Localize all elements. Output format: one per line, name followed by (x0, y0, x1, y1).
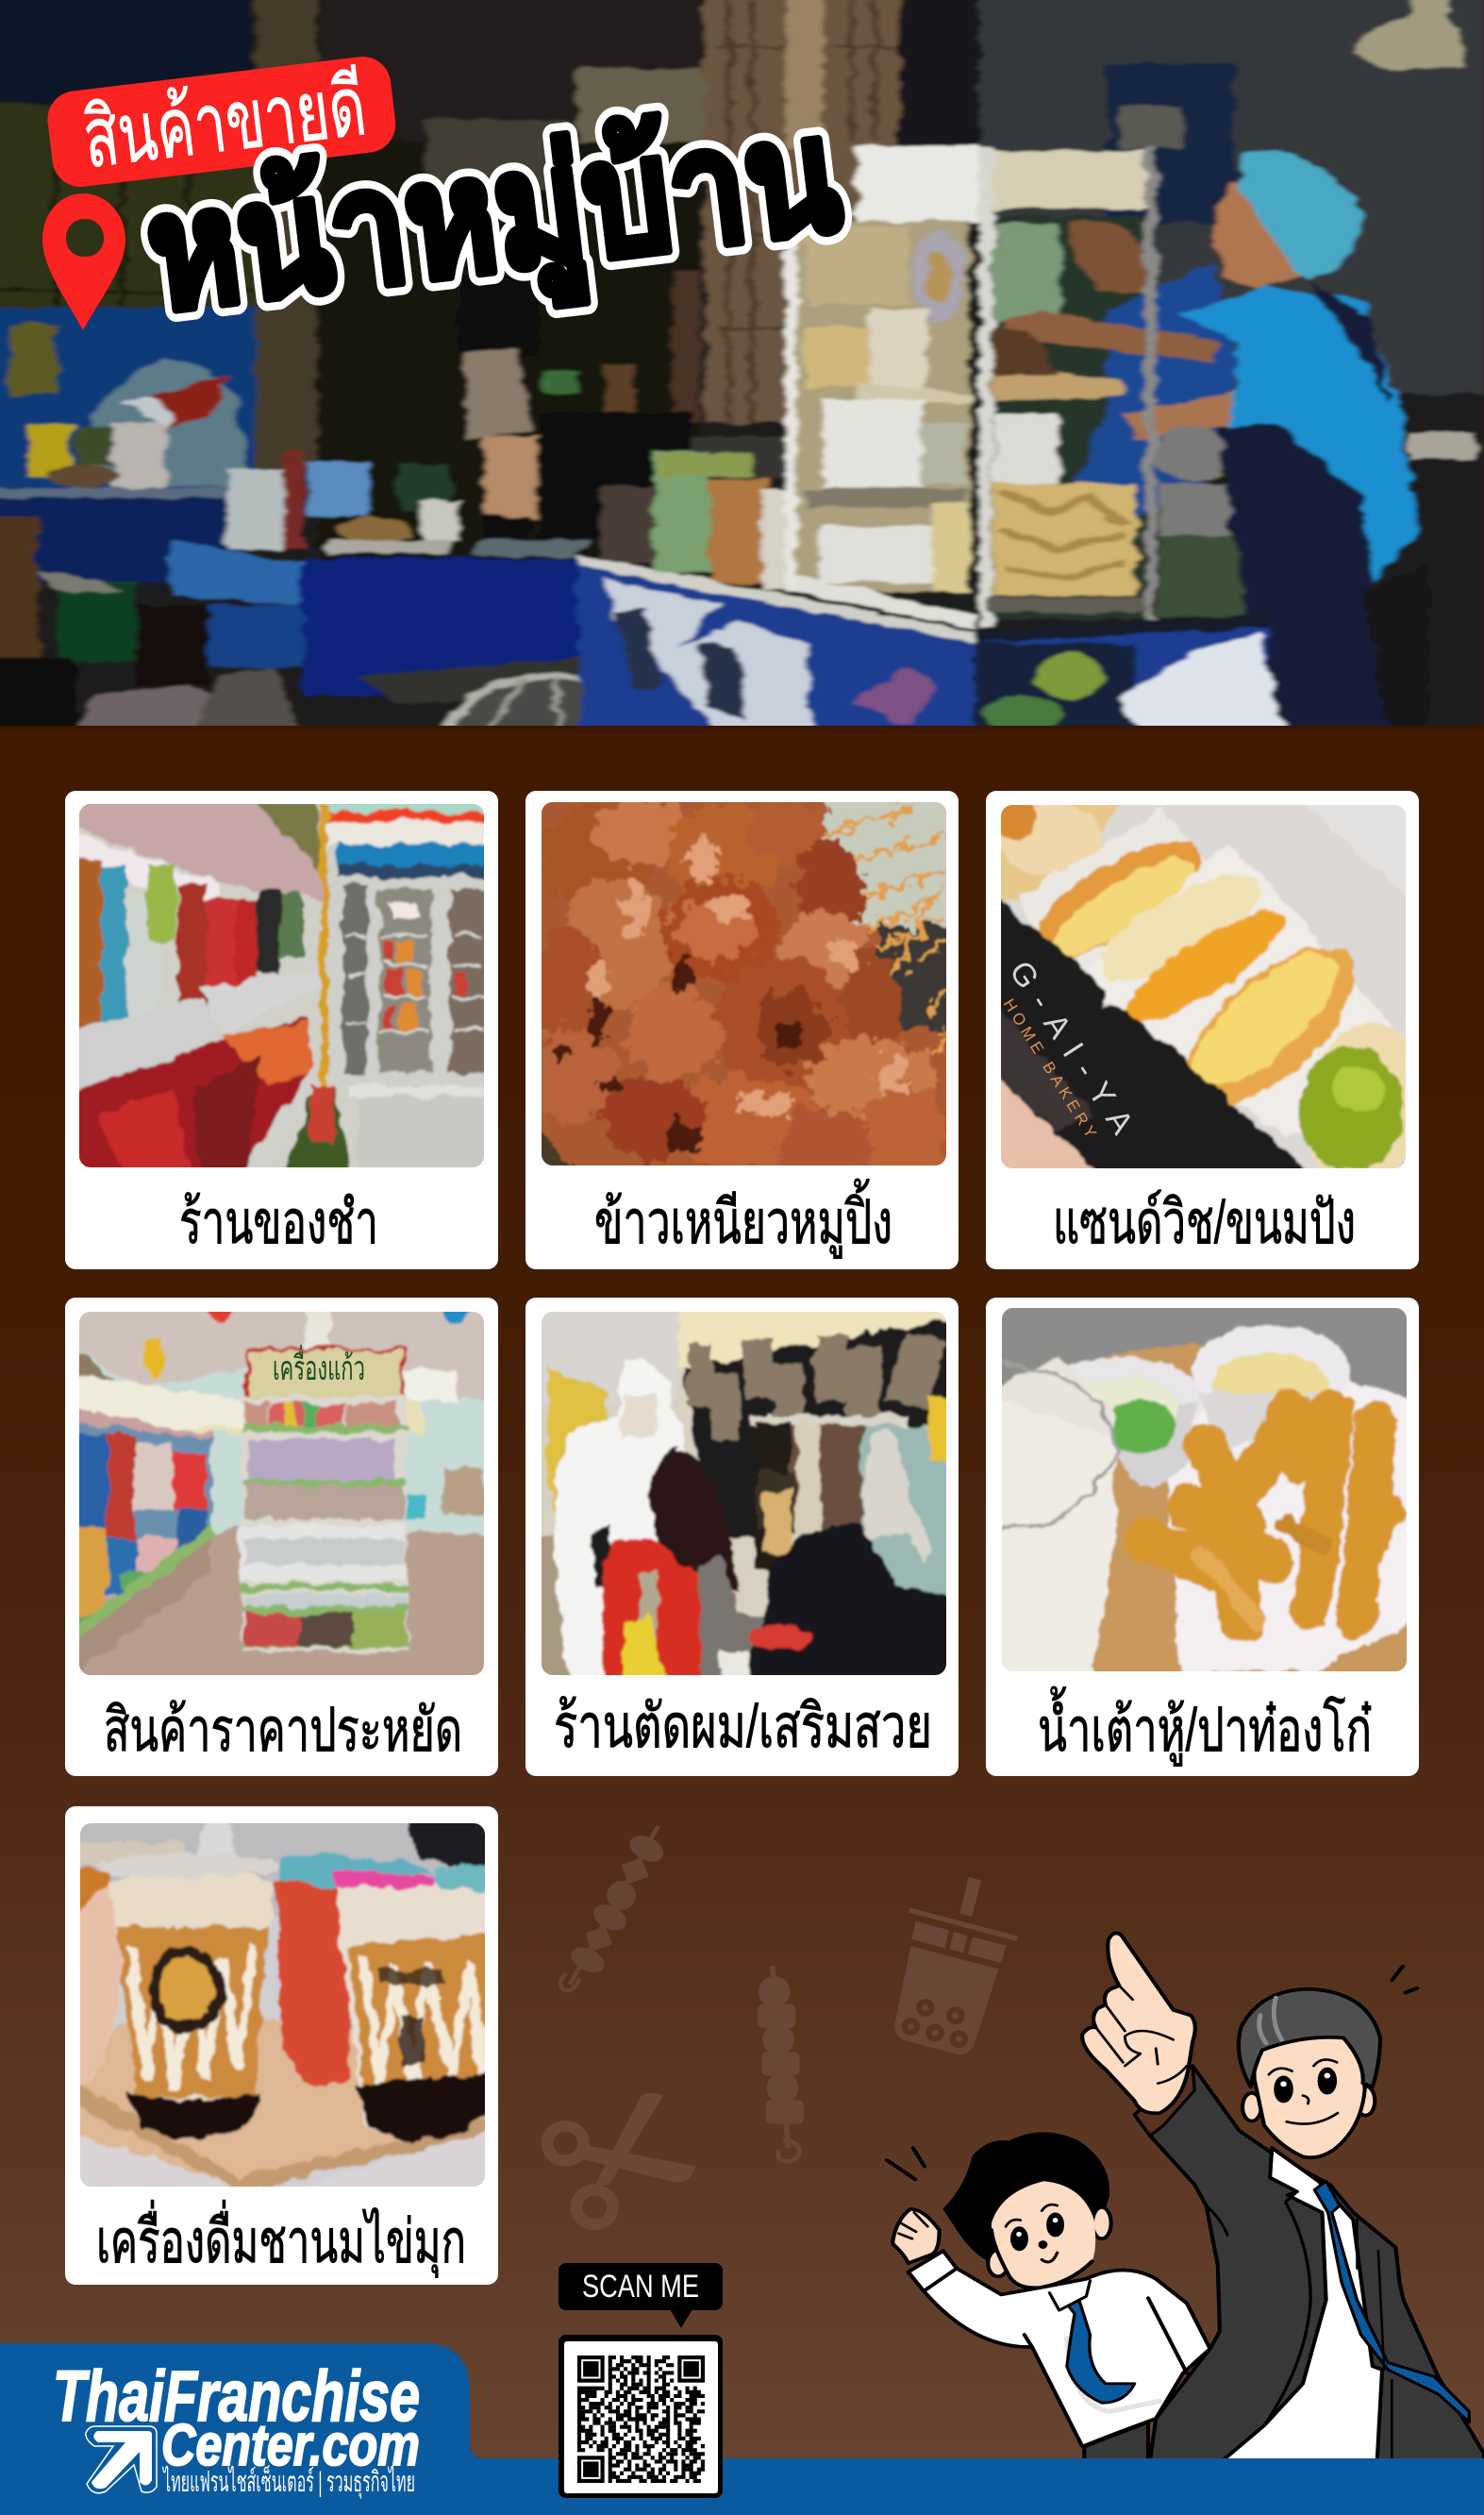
label: ร้านตัดผม/เสริมสวย (554, 1692, 932, 1760)
left tables (171, 540, 303, 606)
icon: arrow (86, 2426, 157, 2493)
decorative icon: bubble tea cup (894, 1877, 1018, 2054)
QR code (559, 2335, 723, 2498)
title badge: best sellers: สินค้าขายดี (78, 59, 371, 185)
woman (1239, 150, 1362, 281)
card: budget goods (60, 1293, 504, 1776)
boy in white shirt (892, 2134, 1210, 2463)
decorative icon: scissors (547, 2093, 695, 2224)
stacked bowls (601, 486, 658, 563)
scan me speech bubble: SCAN ME (582, 2269, 699, 2305)
counter (575, 554, 1268, 746)
label: สินค้าราคาประหยัด (104, 1696, 462, 1764)
photo: boxed sandwiches (1001, 805, 1406, 1168)
card: grocery store (60, 785, 504, 1269)
decorative icon: skewer tilted (560, 1826, 668, 1990)
hero photo: street food stall (0, 0, 1484, 746)
pointing hand (1082, 1933, 1195, 2113)
photo: budget store aisle (79, 1312, 484, 1675)
fist (892, 2209, 940, 2263)
label: เครื่องดื่มชานมไข่มุก (96, 2200, 466, 2278)
brand logo: ThaiFranchise Center: ไทยแฟรนไชส์เซ็นเตอร์ | รวมธุรกิจไทย (162, 2464, 415, 2500)
photo: boxed sandwiches: G-AI-YA (1002, 955, 1141, 1141)
card: bubble milk tea (61, 1804, 505, 2285)
card: grilled pork with sticky rice (513, 774, 975, 1269)
label: แซนด์วิช/ขนมปัง (1053, 1188, 1356, 1256)
eyes and smile (1276, 2077, 1292, 2101)
cabinet (857, 145, 979, 223)
man behind (984, 216, 1155, 620)
photo: convenience store shelves (79, 804, 484, 1167)
label: ข้าวเหนียวหมูปิ้ง (594, 1179, 892, 1259)
man in dark suit (1082, 1933, 1484, 2474)
ears (1092, 2207, 1111, 2238)
person in background (459, 277, 540, 357)
icon: location pin (42, 193, 125, 330)
title badge: best sellers (44, 54, 399, 190)
brand logo: ThaiFranchise Center: ThaiFranchise (53, 2356, 420, 2437)
photo: soy milk with dough sticks (1002, 1308, 1407, 1671)
hair (1239, 1989, 1380, 2087)
main title: in front of the village: หน้าหมู่บ้าน (139, 85, 849, 354)
motion ticks (887, 1967, 1417, 2179)
photo: pork skewers (542, 802, 946, 1165)
photo: budget store aisle: เครื่องแก้ว (273, 1345, 365, 1387)
ears (1242, 2093, 1261, 2121)
card: sandwich and bread (982, 786, 1435, 1269)
card: soy milk and fried dough (983, 1289, 1426, 1776)
decorative icon: skewer vertical (758, 1966, 804, 2162)
scan me speech bubble (559, 2263, 723, 2328)
face (992, 2181, 1095, 2288)
floor left (0, 516, 38, 666)
photo: barber in protective suit (542, 1312, 946, 1675)
brand logo: ThaiFranchise Center: Center.com (161, 2413, 420, 2478)
hero bottom dark edge (0, 726, 1484, 729)
label: ร้านของชำ (179, 1188, 378, 1256)
brand logo: ThaiFranchise Center (53, 2356, 420, 2500)
photo: bubble tea cups (80, 1823, 485, 2187)
face (1254, 2036, 1365, 2157)
main title: in front of the village: หน้าหมู่บ้าน (139, 85, 849, 354)
hair (945, 2134, 1108, 2261)
footer blue band (0, 2343, 1484, 2515)
illustration: two businessmen (887, 1933, 1484, 2474)
photo: boxed sandwiches: HOME BAKERY (1000, 996, 1100, 1141)
card: barber and beauty (523, 1293, 966, 1776)
